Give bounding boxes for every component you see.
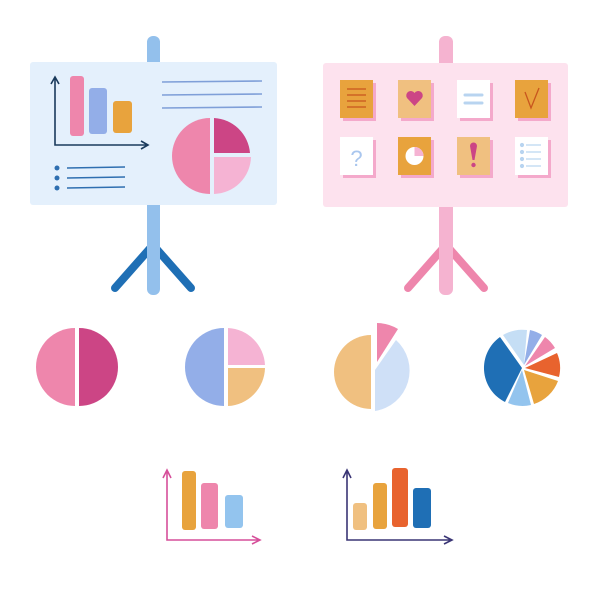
right easel legs <box>408 245 484 288</box>
right easel pole <box>439 36 453 295</box>
pie: two halves <box>36 328 118 406</box>
right easel: sticky notes board <box>323 36 568 295</box>
pie: exploded slice <box>334 323 410 411</box>
bar chart on board <box>51 76 148 149</box>
bullet list <box>54 166 125 190</box>
bar chart: navy axes <box>343 468 452 544</box>
pie: many segments <box>484 330 560 406</box>
note shadows <box>343 83 551 178</box>
note: pie <box>398 137 431 175</box>
note: heart <box>398 80 431 118</box>
right board <box>323 63 568 207</box>
note: lines <box>340 80 373 118</box>
pie chart on board <box>172 118 251 194</box>
note: exclamation <box>457 137 490 175</box>
left easel legs <box>115 245 191 288</box>
left easel: analytics board <box>30 36 277 295</box>
note: question <box>340 137 373 175</box>
pie: half and quarters <box>185 328 265 406</box>
left easel pole <box>147 36 160 295</box>
bar chart: pink axes <box>163 470 260 544</box>
left board <box>30 62 277 205</box>
text lines <box>162 81 262 108</box>
note: list <box>515 137 548 175</box>
note: question: ? <box>350 146 363 171</box>
note: equals <box>457 80 490 118</box>
note: check <box>515 80 548 118</box>
